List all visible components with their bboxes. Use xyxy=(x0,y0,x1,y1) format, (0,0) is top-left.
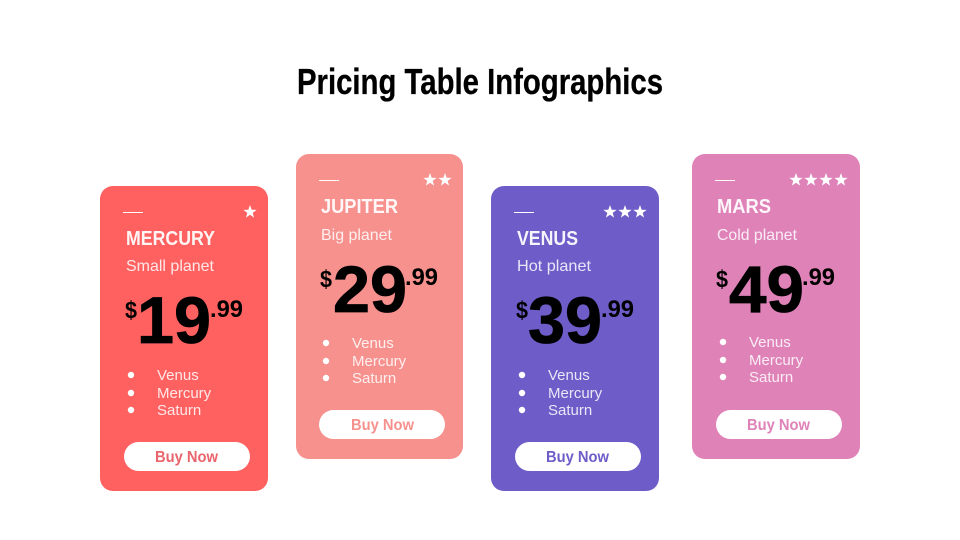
price: .99 xyxy=(601,296,634,323)
icon: two star rating xyxy=(423,173,452,186)
price: 49 xyxy=(729,252,804,326)
plan subtitle: Hot planet xyxy=(517,258,592,275)
feature list: Mercury xyxy=(157,385,212,402)
buy now button xyxy=(124,442,250,471)
feature list: Mercury xyxy=(352,353,407,370)
buy now button: Buy Now xyxy=(747,417,811,434)
price: .99 xyxy=(210,296,243,323)
feature list: Mercury xyxy=(749,352,804,369)
feature list: Saturn xyxy=(548,402,592,419)
feature list xyxy=(519,367,603,419)
feature list xyxy=(720,334,804,386)
feature list xyxy=(323,335,407,387)
accent line xyxy=(514,212,534,213)
card background xyxy=(692,154,860,459)
price xyxy=(516,283,634,357)
plan subtitle: Cold planet xyxy=(717,227,798,244)
feature list xyxy=(128,367,212,419)
buy now button xyxy=(515,442,641,471)
buy now button xyxy=(319,410,445,439)
title: Pricing Table Infographics xyxy=(297,61,663,102)
price xyxy=(320,252,438,326)
buy now button xyxy=(716,410,842,439)
price: $ xyxy=(125,297,138,324)
icon: one star rating xyxy=(243,205,257,218)
feature list: Mercury xyxy=(548,385,603,402)
price: $ xyxy=(516,297,529,324)
price xyxy=(716,252,835,326)
accent line xyxy=(319,180,339,181)
feature list: Venus xyxy=(352,335,394,352)
icon: four star rating xyxy=(789,173,848,186)
card background xyxy=(296,154,463,459)
feature list: Saturn xyxy=(352,370,396,387)
accent line xyxy=(123,212,143,213)
plan subtitle: Small planet xyxy=(126,258,215,275)
feature list: Venus xyxy=(749,334,791,351)
panel: Mars pricing card xyxy=(692,154,860,459)
price: 19 xyxy=(137,283,211,357)
buy now button: Buy Now xyxy=(351,417,415,434)
panel: Jupiter pricing card xyxy=(296,154,463,459)
price xyxy=(125,283,243,357)
price: $ xyxy=(320,266,333,293)
plan name: MARS xyxy=(717,196,771,218)
panel: Mercury pricing card xyxy=(100,186,268,491)
accent line xyxy=(715,180,735,181)
price: .99 xyxy=(405,264,438,291)
feature list: Saturn xyxy=(749,369,793,386)
price: .99 xyxy=(802,264,835,291)
plan subtitle: Big planet xyxy=(321,227,393,244)
plan name: JUPITER xyxy=(321,196,399,218)
buy now button: Buy Now xyxy=(155,449,219,466)
price: 39 xyxy=(528,283,602,357)
buy now button: Buy Now xyxy=(546,449,610,466)
feature list: Saturn xyxy=(157,402,201,419)
price: $ xyxy=(716,266,729,293)
price: 29 xyxy=(333,252,407,326)
card background xyxy=(491,186,659,491)
plan name: VENUS xyxy=(517,228,578,250)
feature list: Venus xyxy=(548,367,590,384)
card background xyxy=(100,186,268,491)
panel: Venus pricing card xyxy=(491,186,659,491)
feature list: Venus xyxy=(157,367,199,384)
icon: three star rating xyxy=(603,205,647,218)
plan name: MERCURY xyxy=(126,228,216,250)
